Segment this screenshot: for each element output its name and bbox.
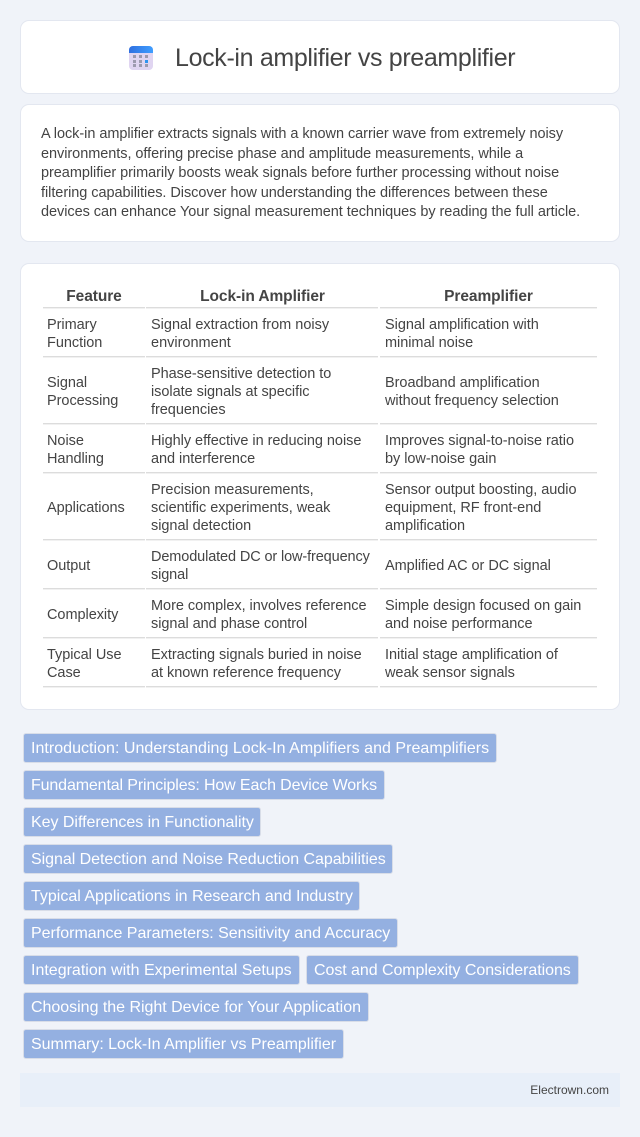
row: signal processing: without frequency selection bbox=[385, 393, 559, 409]
tag: typical applications: Typical Applications in Research and Industry bbox=[31, 888, 353, 905]
row: typical use case bbox=[47, 647, 558, 681]
tag: choosing device bbox=[23, 992, 369, 1022]
tag: performance parameters bbox=[23, 918, 398, 948]
row: complexity bbox=[47, 598, 581, 632]
row: applications: Sensor output boosting, audio bbox=[385, 482, 577, 498]
row: noise handling bbox=[47, 433, 574, 467]
row: signal processing: Broadband amplification bbox=[385, 375, 540, 391]
row: applications: Applications bbox=[47, 500, 125, 516]
row: typical use case: at known reference frequency bbox=[151, 665, 341, 681]
table headers: Feature bbox=[66, 288, 122, 305]
row: primary function: minimal noise bbox=[385, 335, 473, 351]
row: typical use case: Initial stage amplification of bbox=[385, 647, 558, 663]
row: noise handling: by low-noise gain bbox=[385, 451, 496, 467]
row: output: Demodulated DC or low-frequency bbox=[151, 549, 370, 565]
row: signal processing bbox=[47, 366, 559, 418]
footer credit: Electrown.com bbox=[530, 1083, 609, 1097]
row: primary function bbox=[47, 317, 539, 351]
tag: integration bbox=[23, 955, 300, 985]
tag: introduction bbox=[23, 733, 497, 763]
footer bbox=[20, 1073, 620, 1107]
intro card bbox=[20, 104, 620, 242]
row: typical use case: Case bbox=[47, 665, 81, 681]
row: typical use case: weak sensor signals bbox=[385, 665, 515, 681]
tag: introduction: Introduction: Understanding Lock-In Amplifiers and Preamplifiers bbox=[31, 740, 489, 757]
intro text: environments, offering precise phase and amplitude measurements, while a bbox=[41, 146, 523, 162]
intro text: filtering capabilities. Discover how understanding the differences between these bbox=[41, 185, 548, 201]
row: typical use case: Extracting signals buried in noise bbox=[151, 647, 362, 663]
row: noise handling: Highly effective in reducing noise bbox=[151, 433, 361, 449]
row: applications: signal detection bbox=[151, 518, 251, 534]
row: noise handling: Handling bbox=[47, 451, 104, 467]
tag: signal detection bbox=[23, 844, 393, 874]
tag: summary bbox=[23, 1029, 344, 1059]
table card bbox=[20, 263, 620, 710]
row: noise handling: Noise bbox=[47, 433, 84, 449]
row: primary function: Signal extraction from noisy bbox=[151, 317, 329, 333]
row: output: signal bbox=[151, 567, 188, 583]
row: complexity: Complexity bbox=[47, 607, 118, 623]
tag: cost and complexity bbox=[306, 955, 579, 985]
row: applications bbox=[47, 482, 577, 534]
tag: typical applications bbox=[23, 881, 360, 911]
tag: choosing device: Choosing the Right Device for Your Application bbox=[31, 999, 361, 1016]
table headers: Preamplifier bbox=[444, 288, 533, 305]
row: noise handling: and interference bbox=[151, 451, 255, 467]
row: applications: scientific experiments, weak bbox=[151, 500, 330, 516]
row: output: Output bbox=[47, 558, 90, 574]
row: primary function: Signal amplification with bbox=[385, 317, 539, 333]
row: output: Amplified AC or DC signal bbox=[385, 558, 551, 574]
row: typical use case: Typical Use bbox=[47, 647, 122, 663]
row: signal processing: Signal bbox=[47, 375, 87, 391]
row: output bbox=[47, 549, 551, 583]
row: signal processing: Phase-sensitive detection to bbox=[151, 366, 331, 382]
row: applications: amplification bbox=[385, 518, 465, 534]
tag: key differences bbox=[23, 807, 261, 837]
table headers bbox=[66, 288, 533, 305]
intro text: devices can enhance Your signal measurement techniques by reading the full article. bbox=[41, 204, 580, 220]
topic tags bbox=[23, 733, 579, 1059]
row: signal processing: isolate signals at specific bbox=[151, 384, 310, 400]
row: applications: Precision measurements, bbox=[151, 482, 314, 498]
tag: performance parameters: Performance Parameters: Sensitivity and Accuracy bbox=[31, 925, 390, 942]
intro text bbox=[41, 126, 580, 220]
row: complexity: signal and phase control bbox=[151, 616, 307, 632]
tag: summary: Summary: Lock-In Amplifier vs Preamplifier bbox=[31, 1036, 336, 1053]
tag: key differences: Key Differences in Functionality bbox=[31, 814, 254, 831]
row: applications: equipment, RF front-end bbox=[385, 500, 541, 516]
tag: signal detection: Signal Detection and Noise Reduction Capabilities bbox=[31, 851, 386, 868]
row: complexity: Simple design focused on gain bbox=[385, 598, 581, 614]
row: signal processing: frequencies bbox=[151, 402, 226, 418]
tag: integration: Integration with Experimental Setups bbox=[31, 962, 292, 979]
intro text: A lock-in amplifier extracts signals with a known carrier wave from extremely noisy bbox=[41, 126, 563, 142]
row: complexity: More complex, involves reference bbox=[151, 598, 367, 614]
row: primary function: Function bbox=[47, 335, 102, 351]
icon: calendar bbox=[129, 46, 153, 70]
row: signal processing: Processing bbox=[47, 393, 118, 409]
comparison table bbox=[43, 288, 597, 688]
header card bbox=[20, 20, 620, 94]
tag: cost and complexity: Cost and Complexity Considerations bbox=[314, 962, 571, 979]
tag: fundamental principles bbox=[23, 770, 385, 800]
row: noise handling: Improves signal-to-noise ratio bbox=[385, 433, 574, 449]
row: primary function: Primary bbox=[47, 317, 97, 333]
intro text: preamplifier primarily boosts weak signals before further processing without noise bbox=[41, 165, 559, 181]
table headers: Lock-in Amplifier bbox=[200, 288, 325, 305]
title: Lock-in amplifier vs preamplifier bbox=[175, 44, 515, 72]
row: complexity: and noise performance bbox=[385, 616, 532, 632]
tag: fundamental principles: Fundamental Principles: How Each Device Works bbox=[31, 777, 377, 794]
row: primary function: environment bbox=[151, 335, 231, 351]
